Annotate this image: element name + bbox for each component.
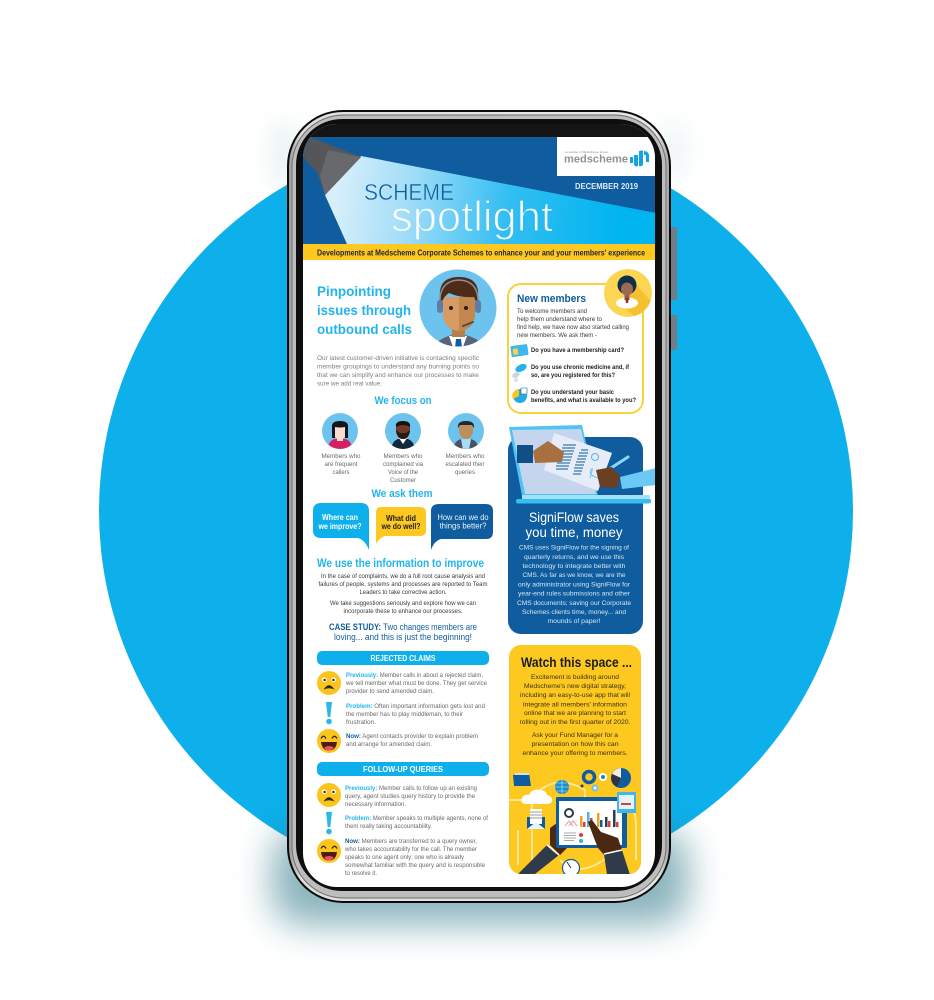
member: frequent callers [322, 413, 361, 476]
case: rejected claims previously [317, 671, 488, 695]
question: basic benefits [531, 389, 636, 404]
member: complained via voice of the customer: complained via [383, 461, 424, 468]
member: frequent callers: are frequent [324, 461, 358, 468]
heading: pinpointing issues [318, 286, 412, 334]
body text: CMS uses SigniFlow for the signing of [519, 544, 629, 552]
icon: sad face [317, 671, 341, 695]
folder [513, 773, 531, 786]
logo box: medscheme [564, 154, 628, 166]
heading: we ask them: We ask them [372, 488, 433, 500]
body text: mounds of paper! [548, 618, 601, 625]
text: complaints and suggestions: failures of people, systems and processes are reported to Team [318, 581, 488, 588]
heading: case study: CASE STUDY: Two changes members are [329, 622, 477, 632]
icon: happy face [317, 839, 341, 863]
body text: integrate all members' information [523, 702, 627, 708]
cloud [522, 790, 552, 804]
member: escalated queries: queries [455, 469, 475, 476]
icon: exclamation mark [326, 702, 332, 724]
avatar: woman [322, 413, 358, 450]
phone screen [295, 118, 663, 877]
speech bubble: how can we do things better: things better? [440, 522, 487, 530]
heading: pinpointing issues: outbound calls [317, 321, 412, 337]
speech bubble: how can we do things better: How can we do [438, 513, 489, 522]
question: membership card: Do you have a membership card? [531, 347, 624, 354]
body text: only administrator using SigniFlow for [518, 582, 631, 588]
case: rejected claims problem: frustration. [346, 719, 376, 726]
phone upper shadow [272, 125, 686, 185]
case: rejected claims now [317, 729, 478, 753]
member: complained via voice of the customer: Members who [384, 453, 423, 460]
question: chronic medicine: so, are you registered for this? [531, 372, 615, 379]
heading: case study [329, 622, 477, 642]
case: follow-up previously [317, 783, 478, 808]
background circle [99, 134, 853, 888]
case: follow-up now: Now: Members are transferred to a query owner, [345, 838, 477, 845]
body text: Schemes clients time, money... and [522, 609, 626, 616]
banner: rejected claims [317, 651, 489, 665]
icon: happy face [317, 729, 341, 753]
body text: technology to integrate better with [522, 563, 626, 570]
phone body [287, 110, 671, 903]
case: follow-up now: speaks to one agent only; one who is already [345, 854, 465, 861]
icon: membership card [510, 344, 529, 357]
body text [520, 674, 631, 757]
title: spotlight: spotlight [391, 193, 553, 241]
body text: CMS. As far as we know, we are the [522, 572, 626, 579]
heading: Watch this space ... [521, 655, 632, 670]
spotlight lamp [303, 137, 361, 195]
question: chronic medicine: Do you use chronic medicine and, if [531, 364, 630, 371]
phone side buttons [671, 227, 677, 350]
body text: year-end rules submissions and other [518, 590, 631, 598]
speech bubble: where can we improve: Where can [322, 513, 358, 522]
right hand and sleeve [588, 820, 630, 875]
intro text: To welcome members and [517, 308, 587, 315]
left hand and sleeve [518, 823, 567, 874]
member: escalated queries: escalated their [446, 461, 484, 468]
case: follow-up previously: Previously: Member calls to follow up an existing [345, 785, 478, 792]
member: frequent callers: Members who [322, 453, 361, 460]
avatar: man in grey suit [448, 413, 484, 450]
logo box: a member of Medscheme Group [565, 150, 608, 154]
intro paragraph: Our latest customer-driven initiative is contacting specific [317, 355, 479, 362]
case: rejected claims problem: Problem: Often important information gets lost and [346, 703, 486, 710]
speech bubble: where can we improve: we improve? [318, 522, 362, 531]
panel: new members [508, 269, 655, 413]
intro paragraph: that we can simplify and enhance our processes to make [317, 372, 480, 379]
heading: pinpointing issues: issues through [317, 302, 411, 318]
text: complaints and suggestions: incorporate these to enhance our processes. [344, 608, 463, 615]
member: frequent callers: callers [332, 469, 350, 476]
case: follow-up problem: Problem: Member speaks to multiple agents, none of [345, 815, 488, 822]
globe [555, 780, 569, 794]
avatar: new member [604, 269, 655, 320]
case: follow-up previously: necessary information. [345, 801, 406, 808]
case: follow-up problem: them really taking accountability. [345, 823, 432, 830]
envelope [527, 809, 545, 829]
heading: case study: loving... and this is just the beginning! [334, 632, 472, 642]
pie chart [611, 768, 631, 788]
body text: Medscheme's new digital strategy, [524, 683, 626, 690]
question: chronic medicine [531, 364, 630, 379]
body text: CMS documents; saving our Corporate [517, 600, 631, 607]
icon: exclamation mark [326, 812, 332, 834]
body text: including an easy-to-use app that will [520, 692, 631, 699]
case: rejected claims previously: Previously: Member calls in about a rejected claim, [346, 672, 483, 679]
intro paragraph: member groupings to understand any burning points so [317, 364, 480, 370]
case: rejected claims problem [326, 702, 486, 726]
case: follow-up previously: query, agent studies query history to provide the [345, 793, 476, 800]
illustration: laptop signing [509, 425, 656, 504]
member: escalated queries: Members who [446, 453, 485, 460]
yellow strapline: Developments at Medscheme Corporate Schemes to enhance your and your members' experience [317, 248, 645, 257]
tablet bar chart [580, 810, 618, 827]
left sleeve and hand [517, 441, 564, 463]
heading: SigniFlow saves [529, 510, 619, 525]
floating widget [617, 792, 636, 813]
text: complaints and suggestions [318, 573, 488, 615]
intro text: new members. We ask them - [517, 332, 597, 339]
panel: watch this space [509, 645, 641, 876]
heading: New members [517, 293, 586, 305]
case: rejected claims now: Now: Agent contacts provider to explain problem [346, 733, 478, 740]
banner: follow-up queries: FOLLOW-UP QUERIES [363, 765, 443, 774]
member: escalated queries [446, 413, 485, 476]
question: basic benefits: benefits, and what is available to you? [531, 397, 636, 404]
pen [611, 457, 628, 468]
date: DECEMBER 2019 [575, 182, 639, 191]
text: complaints and suggestions: Leaders to take corrective action. [360, 589, 447, 596]
body text: Ask your Fund Manager for a [532, 732, 618, 739]
intro text: find help, we have now also started calling [517, 324, 629, 331]
case: follow-up now: who takes accountability for the call. The member [344, 846, 477, 853]
speech bubble: what did we do well [376, 507, 426, 544]
spotlight beam [325, 156, 656, 244]
right sleeve and hand [596, 467, 656, 489]
speech bubble: how can we do things better [431, 504, 493, 550]
question: basic benefits: Do you understand your basic [531, 389, 615, 396]
body text: rolling out in the first quarter of 2020. [520, 719, 631, 726]
member: complained via voice of the customer: Customer [390, 477, 416, 484]
screen top bezel [310, 124, 648, 137]
title: scheme: SCHEME [364, 179, 454, 205]
case: rejected claims problem: the member has to play middleman, to their [346, 711, 463, 718]
heading: you time, money [526, 525, 623, 540]
icon: sad face [317, 783, 341, 807]
body text: presentation on how this can [532, 741, 619, 748]
speech bubble: what did we do well: What did [386, 514, 416, 523]
case: follow-up now [317, 838, 486, 877]
banner: follow-up queries [317, 762, 489, 776]
case: follow-up now: to resolve it. [345, 870, 377, 877]
body text [517, 544, 631, 625]
speech bubble: where can we improve [313, 503, 369, 550]
yellow strapline [303, 244, 656, 260]
case: follow-up now: somewhat familiar with the query and is responsible [345, 862, 486, 869]
banner: rejected claims: REJECTED CLAIMS [370, 654, 436, 663]
header banner [303, 137, 656, 244]
gears [580, 772, 606, 790]
intro paragraph [317, 355, 480, 388]
text: complaints and suggestions: We take suggestions seriously and explore how we can [330, 600, 476, 607]
case: rejected claims previously: we tell member what must be done. They get service [345, 680, 488, 687]
intro text [517, 308, 629, 339]
phone shadow [272, 830, 688, 925]
member: complained via voice of the customer: Voice of the [388, 469, 419, 476]
icon: medicine [511, 362, 528, 382]
case: follow-up problem [326, 812, 488, 834]
panel: signiflow [508, 425, 656, 634]
text: complaints and suggestions: In the case of complaints, we do a full root cause analysis and [321, 573, 485, 580]
icon: benefits pie [512, 388, 527, 403]
body text: Excitement is building around [531, 674, 619, 681]
body text: quarterly returns, and we use this [524, 554, 625, 561]
logo box [557, 137, 656, 176]
signed document [544, 433, 612, 491]
tablet [556, 797, 627, 848]
heading: pinpointing issues: Pinpointing [317, 283, 391, 299]
body text: enhance your offering to members. [522, 750, 628, 757]
avatar: man in dark suit [385, 413, 421, 450]
body text: online that we are planning to start [524, 710, 626, 717]
illustration: digital strategy [509, 768, 636, 876]
case: rejected claims previously: provider to send amended claim. [346, 688, 434, 695]
speech bubble: what did we do well: we do well? [381, 522, 421, 531]
illustration: call agent [419, 269, 497, 350]
heading: we use the information to improve: We use the information to improve [317, 558, 484, 570]
clock [562, 860, 580, 876]
heading [526, 510, 623, 540]
heading: we focus on: We focus on [374, 395, 432, 407]
intro text: help them understand where to [517, 316, 602, 323]
case: rejected claims now: and arrange for amended claim. [346, 741, 432, 748]
member: complained via voice of the customer [383, 413, 424, 484]
intro paragraph: sure we add real value. [317, 380, 382, 388]
